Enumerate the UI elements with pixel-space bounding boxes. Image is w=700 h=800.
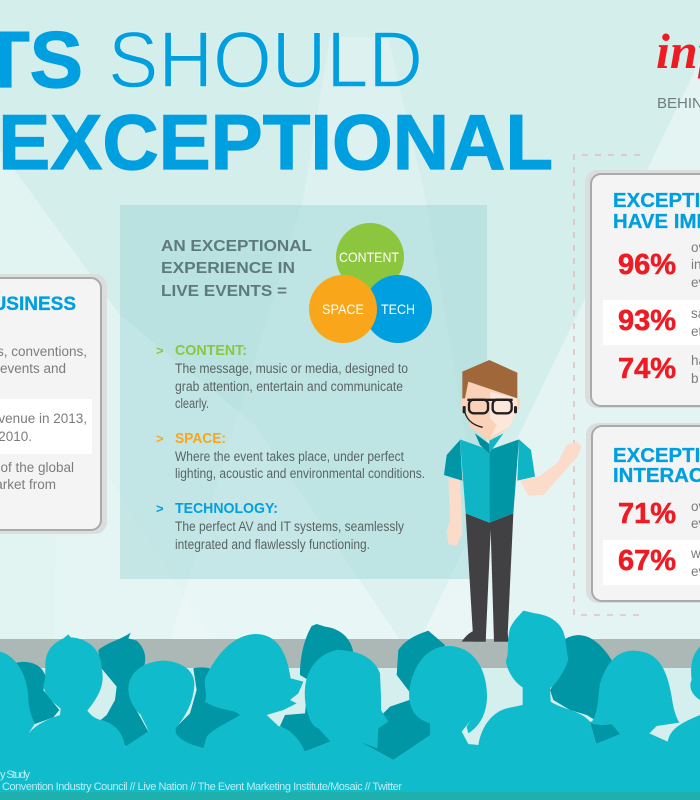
item: space	[156, 430, 425, 481]
item: content	[156, 342, 408, 411]
panel: business card	[0, 274, 107, 534]
sources text: Convention Industry Council // Live Nation // The Event Marketing Institute/Mosaic // Twitter	[2, 781, 402, 793]
venn diagram: content, space, tech: TECH	[381, 301, 415, 317]
item: space: SPACE:	[175, 430, 226, 447]
stat: 71%: 71%	[618, 498, 676, 530]
item: content: >	[156, 343, 164, 358]
item: content: clearly.	[175, 396, 209, 411]
panel: business card: venue in 2013,	[0, 411, 87, 426]
title	[0, 15, 553, 186]
sources text	[0, 769, 402, 793]
back row of audience	[0, 624, 621, 760]
item: technology	[156, 500, 404, 552]
panel heading: AN EXCEPTIONAL	[161, 238, 312, 255]
panel: impact card: HAVE IMI	[613, 211, 700, 233]
stat: 67%: 67%	[618, 545, 676, 577]
panel heading	[161, 238, 312, 300]
panel: business card: of the global	[0, 460, 74, 475]
stat: 96%: 96%	[618, 249, 676, 281]
item: content: grab attention, entertain and communicate	[175, 379, 403, 394]
panel heading: LIVE EVENTS =	[161, 283, 287, 300]
front row of audience	[0, 611, 700, 800]
stat: 74%: 74%	[618, 353, 676, 385]
dashed bracket around right cards	[574, 155, 640, 615]
venn diagram: content, space, tech: SPACE	[322, 301, 364, 317]
item: content: The message, music or media, designed to	[175, 361, 408, 376]
stage	[0, 639, 700, 800]
item: technology: integrated and flawlessly functioning.	[175, 537, 370, 552]
item: space: lighting, acoustic and environmental conditions.	[175, 466, 425, 481]
panel: impact card	[585, 170, 700, 408]
stat: 93%: 93%	[618, 305, 676, 337]
audience silhouettes	[0, 611, 700, 800]
panel: interaction card: EXCEPTI	[613, 445, 700, 467]
panel: business card: events and	[0, 361, 66, 376]
venn diagram: content, space, tech	[309, 223, 432, 343]
panel: impact card: EXCEPTI	[613, 190, 700, 212]
item: technology: TECHNOLOGY:	[175, 500, 278, 517]
item: space: Where the event takes place, under perfect	[175, 449, 404, 464]
footer strip	[0, 792, 700, 800]
item: technology: >	[156, 501, 164, 516]
panel: impact card: b	[691, 371, 699, 386]
sources text: y Study	[0, 769, 30, 781]
item: technology: The perfect AV and IT systems, seamlessly	[175, 519, 404, 534]
panel heading: EXPERIENCE IN	[161, 260, 295, 277]
panel: interaction card	[586, 423, 700, 603]
logo	[656, 23, 700, 112]
item: content: CONTENT:	[175, 342, 247, 359]
presenter figure	[444, 360, 582, 642]
panel: exceptional experience	[120, 205, 487, 579]
venn diagram: content, space, tech: CONTENT	[339, 249, 399, 265]
title: SHOULD	[108, 15, 423, 104]
item: space: >	[156, 431, 164, 446]
